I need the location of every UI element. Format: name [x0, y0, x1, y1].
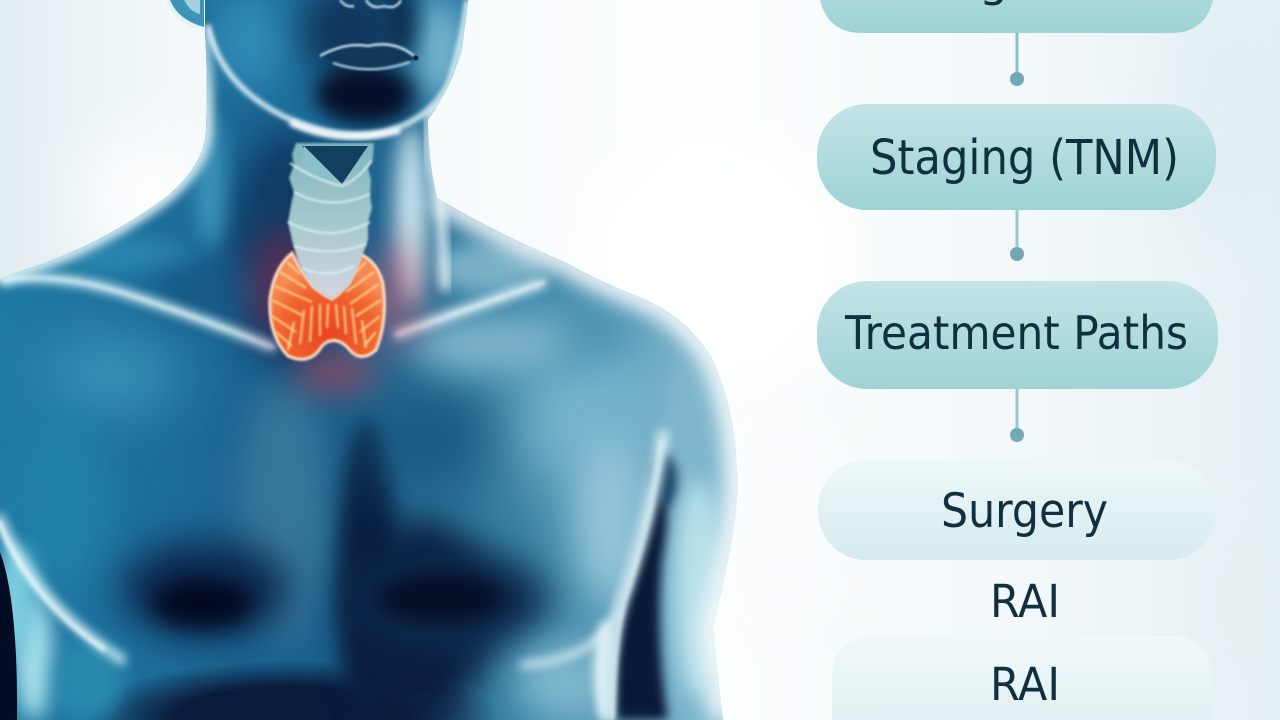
lower band — [94, 662, 492, 720]
right pec rim — [612, 440, 662, 720]
step: staging — [817, 104, 1216, 210]
silhouette edge glow — [0, 30, 207, 280]
option: RAI second: RAI — [990, 658, 1060, 711]
connector 2 — [1010, 210, 1024, 261]
left pec shadow — [120, 540, 290, 640]
nose — [340, 0, 401, 7]
right armpit dark — [615, 465, 668, 720]
face — [206, 0, 468, 135]
option: surgery — [818, 460, 1216, 560]
collarbone right — [395, 282, 545, 335]
jaw rim — [208, 0, 467, 135]
step: treatment paths: Treatment Paths — [844, 306, 1188, 360]
step: diagnosis pill (cropped) — [820, 0, 1213, 33]
lower abdomen right — [515, 644, 615, 720]
option: RAI second — [832, 636, 1212, 720]
option: RAI: RAI — [990, 575, 1060, 628]
ear: left — [166, 0, 208, 32]
flowchart: care pathway — [817, 0, 1218, 720]
red glow — [251, 230, 421, 392]
left arm dark — [0, 552, 17, 720]
right pec shadow — [350, 548, 550, 652]
center channel — [338, 420, 398, 720]
shoulder right — [570, 310, 636, 366]
thyroid gland — [270, 253, 384, 359]
step: staging: Staging (TNM) — [870, 130, 1179, 186]
right arm — [675, 438, 680, 455]
connector 3 — [1010, 389, 1024, 442]
lips — [320, 44, 418, 69]
left pec tone — [40, 340, 180, 410]
torso silhouette and shading — [0, 0, 740, 720]
illustration: human torso with thyroid — [0, 0, 740, 720]
connector 1 — [1010, 33, 1024, 86]
right pec tone — [510, 350, 670, 490]
left arm highlight — [14, 600, 54, 720]
neck and upper chest — [230, 130, 350, 370]
collarbone left — [0, 278, 275, 348]
step: treatment paths — [817, 281, 1218, 389]
trachea — [288, 143, 374, 299]
option: surgery: Surgery — [941, 484, 1108, 539]
